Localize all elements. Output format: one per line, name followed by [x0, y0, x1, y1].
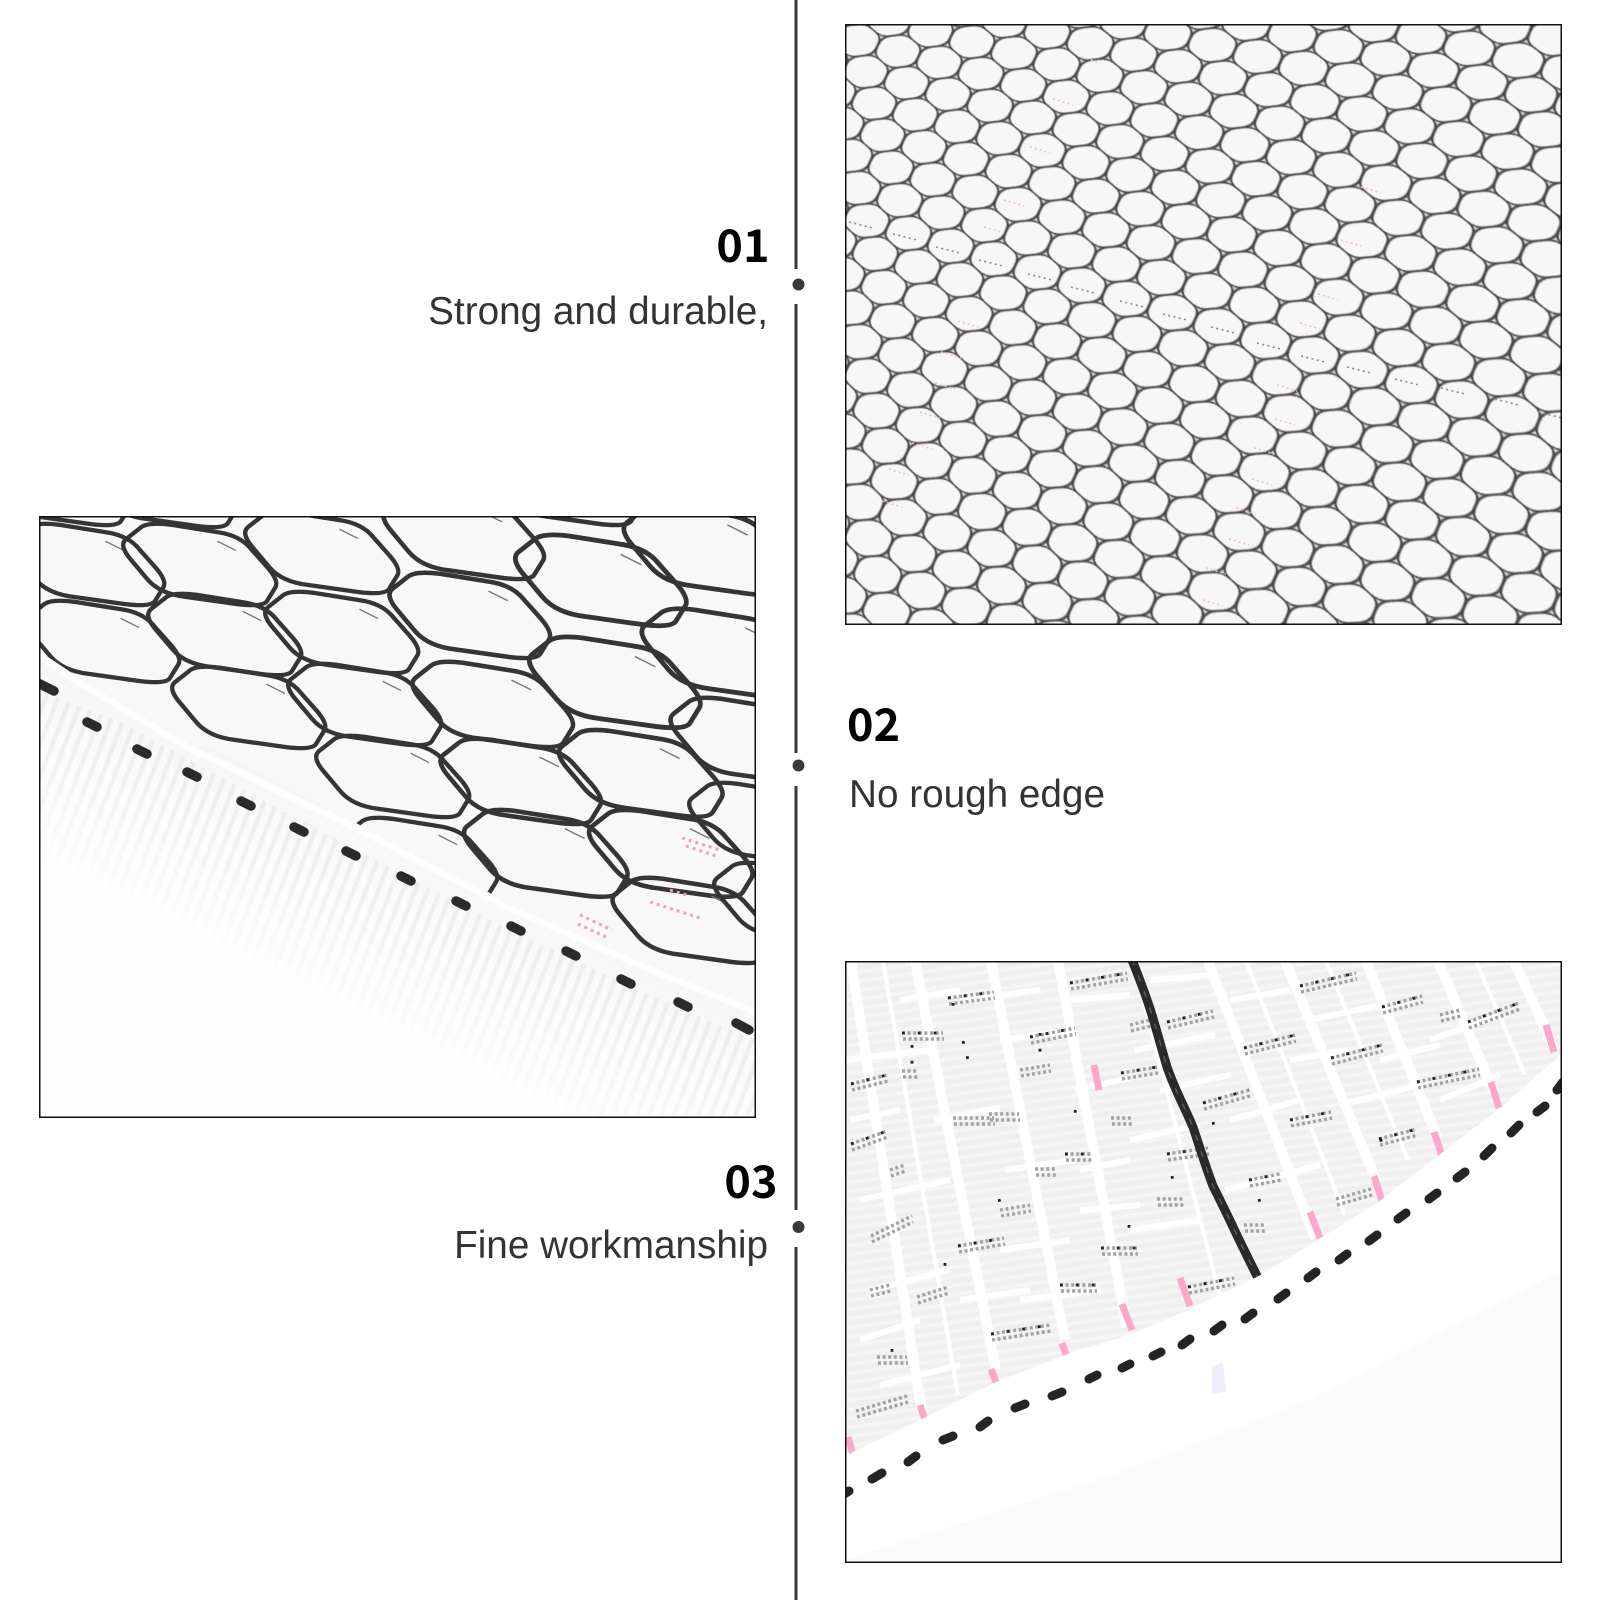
vertical timeline with dots [792, 0, 804, 1600]
panel: stitched seam close-up photo (bottom right) [845, 961, 1562, 1563]
number 02: 02 [847, 689, 900, 754]
pink stitches [848, 1025, 1554, 1455]
seam band [841, 1054, 1563, 1563]
grey mesh patches [851, 973, 1520, 1417]
dot 02 [792, 760, 804, 772]
white warp threads [851, 961, 1555, 1413]
caption 02: No rough edge [849, 773, 1105, 816]
panel: close-up of large mesh and seam (left) [39, 516, 756, 1118]
black twisted cord [1132, 960, 1257, 1276]
caption 03: Fine workmanship [454, 1224, 768, 1267]
panel: fine honeycomb mesh photo (top right) [845, 24, 1562, 625]
dot 03 [792, 1221, 804, 1233]
caption 01: Strong and durable, [428, 290, 768, 333]
pink thread speckles [578, 838, 720, 937]
number 03: 03 [724, 1146, 778, 1211]
seam band [40, 657, 754, 1071]
dot 01 [792, 278, 804, 290]
number 01: 01 [716, 210, 770, 275]
